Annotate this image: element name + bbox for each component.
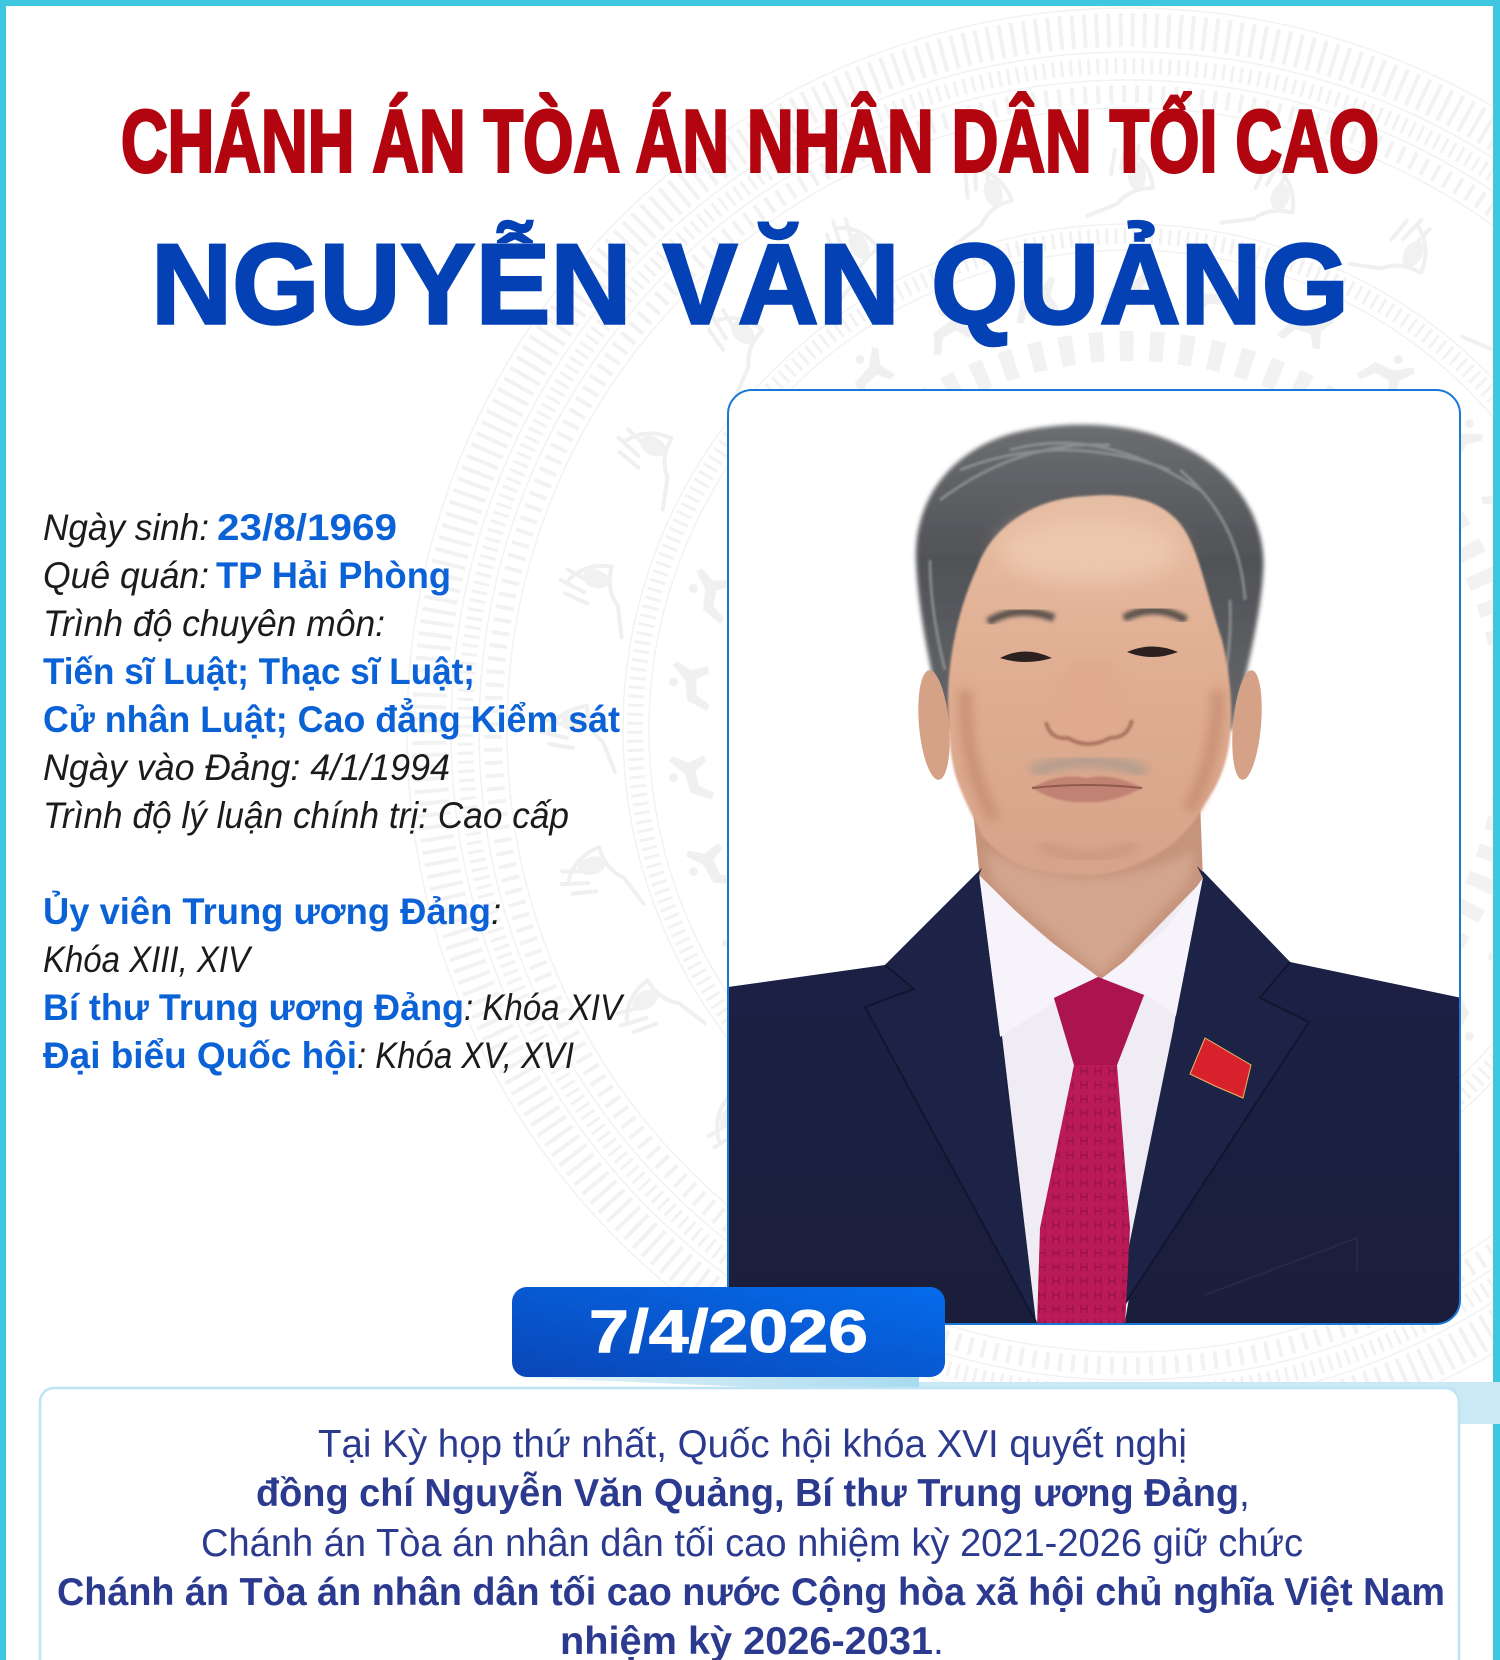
nose shadow: [1046, 720, 1132, 744]
text block: party positions: [43, 890, 625, 1076]
text block: decision statement: Tại Kỳ họp thứ nhất, Quốc hội khóa XVI quyết nghị: [318, 1423, 1187, 1466]
tie: [1037, 977, 1144, 1326]
left lapel: [885, 868, 1036, 1318]
text block: decision statement: Chánh án Tòa án nhân dân tối cao nước Cộng hòa xã hội chủ nghĩa Việt Nam: [57, 1571, 1445, 1614]
neck shadow: [985, 850, 1195, 975]
portrait photo panel: [728, 390, 1462, 1326]
text block: party positions: Bí thư Trung ương Đảng: [43, 987, 464, 1028]
title: name: NGUYỄN VĂN QUẢNG: [151, 222, 1349, 348]
moustache shade: [1032, 761, 1146, 772]
text block: decision statement: đồng chí Nguyễn Văn Quảng, Bí thư Trung ương Đảng: [256, 1471, 1239, 1515]
text block: decision statement: ,: [1239, 1472, 1250, 1515]
right ear: [1232, 670, 1262, 780]
text block: decision statement: Chánh án Tòa án nhân dân tối cao nhiệm kỳ 2021-2026 giữ chức: [201, 1522, 1303, 1565]
shirt: [1002, 886, 1197, 1322]
right eye: [1127, 646, 1178, 657]
text block: personal details: TP Hải Phòng: [216, 555, 451, 596]
bottom panel: [40, 1388, 1459, 1660]
hair back: [916, 425, 1263, 730]
right lapel: [1126, 866, 1290, 1304]
left brow: [988, 612, 1054, 622]
mouth: [1032, 776, 1142, 802]
text block: personal details: Cử nhân Luật; Cao đẳng Kiểm sát: [43, 698, 620, 740]
ribbon band behind panel: [820, 1382, 1500, 1424]
text block: personal details: Ngày vào Đảng: 4/1/1994: [43, 747, 450, 788]
forehead highlight: [1000, 516, 1180, 584]
hair strands: [930, 443, 1245, 690]
text block: party positions: : Khóa XV, XVI: [357, 1035, 574, 1076]
suit: [728, 865, 1462, 1326]
nose: [1049, 660, 1131, 743]
left collar: [979, 875, 1101, 1037]
text block: party positions: Đại biểu Quốc hội: [43, 1035, 357, 1076]
mouth line: [1032, 785, 1142, 788]
text block: decision statement: [57, 1423, 1445, 1660]
face: [948, 495, 1231, 875]
text block: personal details: Trình độ lý luận chính trị: Cao cấp: [43, 795, 569, 836]
text block: personal details: Ngày sinh:: [43, 507, 209, 548]
text block: personal details: [43, 507, 620, 836]
pocket: [1205, 1238, 1357, 1295]
cheek shading: [965, 690, 1218, 820]
left eye: [1000, 652, 1052, 662]
tie knot shade: [1054, 977, 1144, 1065]
party pin: [1190, 1038, 1251, 1098]
background: bronze drum pattern: [407, 8, 1500, 1452]
text block: party positions: :: [491, 891, 501, 932]
text block: personal details: Trình độ chuyên môn:: [43, 603, 385, 644]
date badge: [512, 1287, 945, 1377]
left ear: [918, 670, 950, 780]
chin shadow: [1040, 845, 1136, 856]
text block: personal details: 23/8/1969: [217, 507, 397, 548]
lapel edges: [865, 962, 1309, 1322]
ribbon wedge under date badge: [512, 1377, 919, 1394]
text block: party positions: Ủy viên Trung ương Đảng: [43, 890, 491, 932]
right collar: [1101, 878, 1203, 1016]
date badge: 7/4/2026: [589, 1298, 868, 1365]
neck: [972, 800, 1203, 985]
text block: personal details: Tiến sĩ Luật; Thạc sĩ Luật;: [43, 651, 475, 692]
text block: party positions: Khóa XIII, XIV: [43, 939, 253, 980]
right brow: [1124, 610, 1186, 620]
text block: party positions: : Khóa XIV: [464, 987, 625, 1028]
text block: personal details: Quê quán:: [43, 555, 209, 596]
